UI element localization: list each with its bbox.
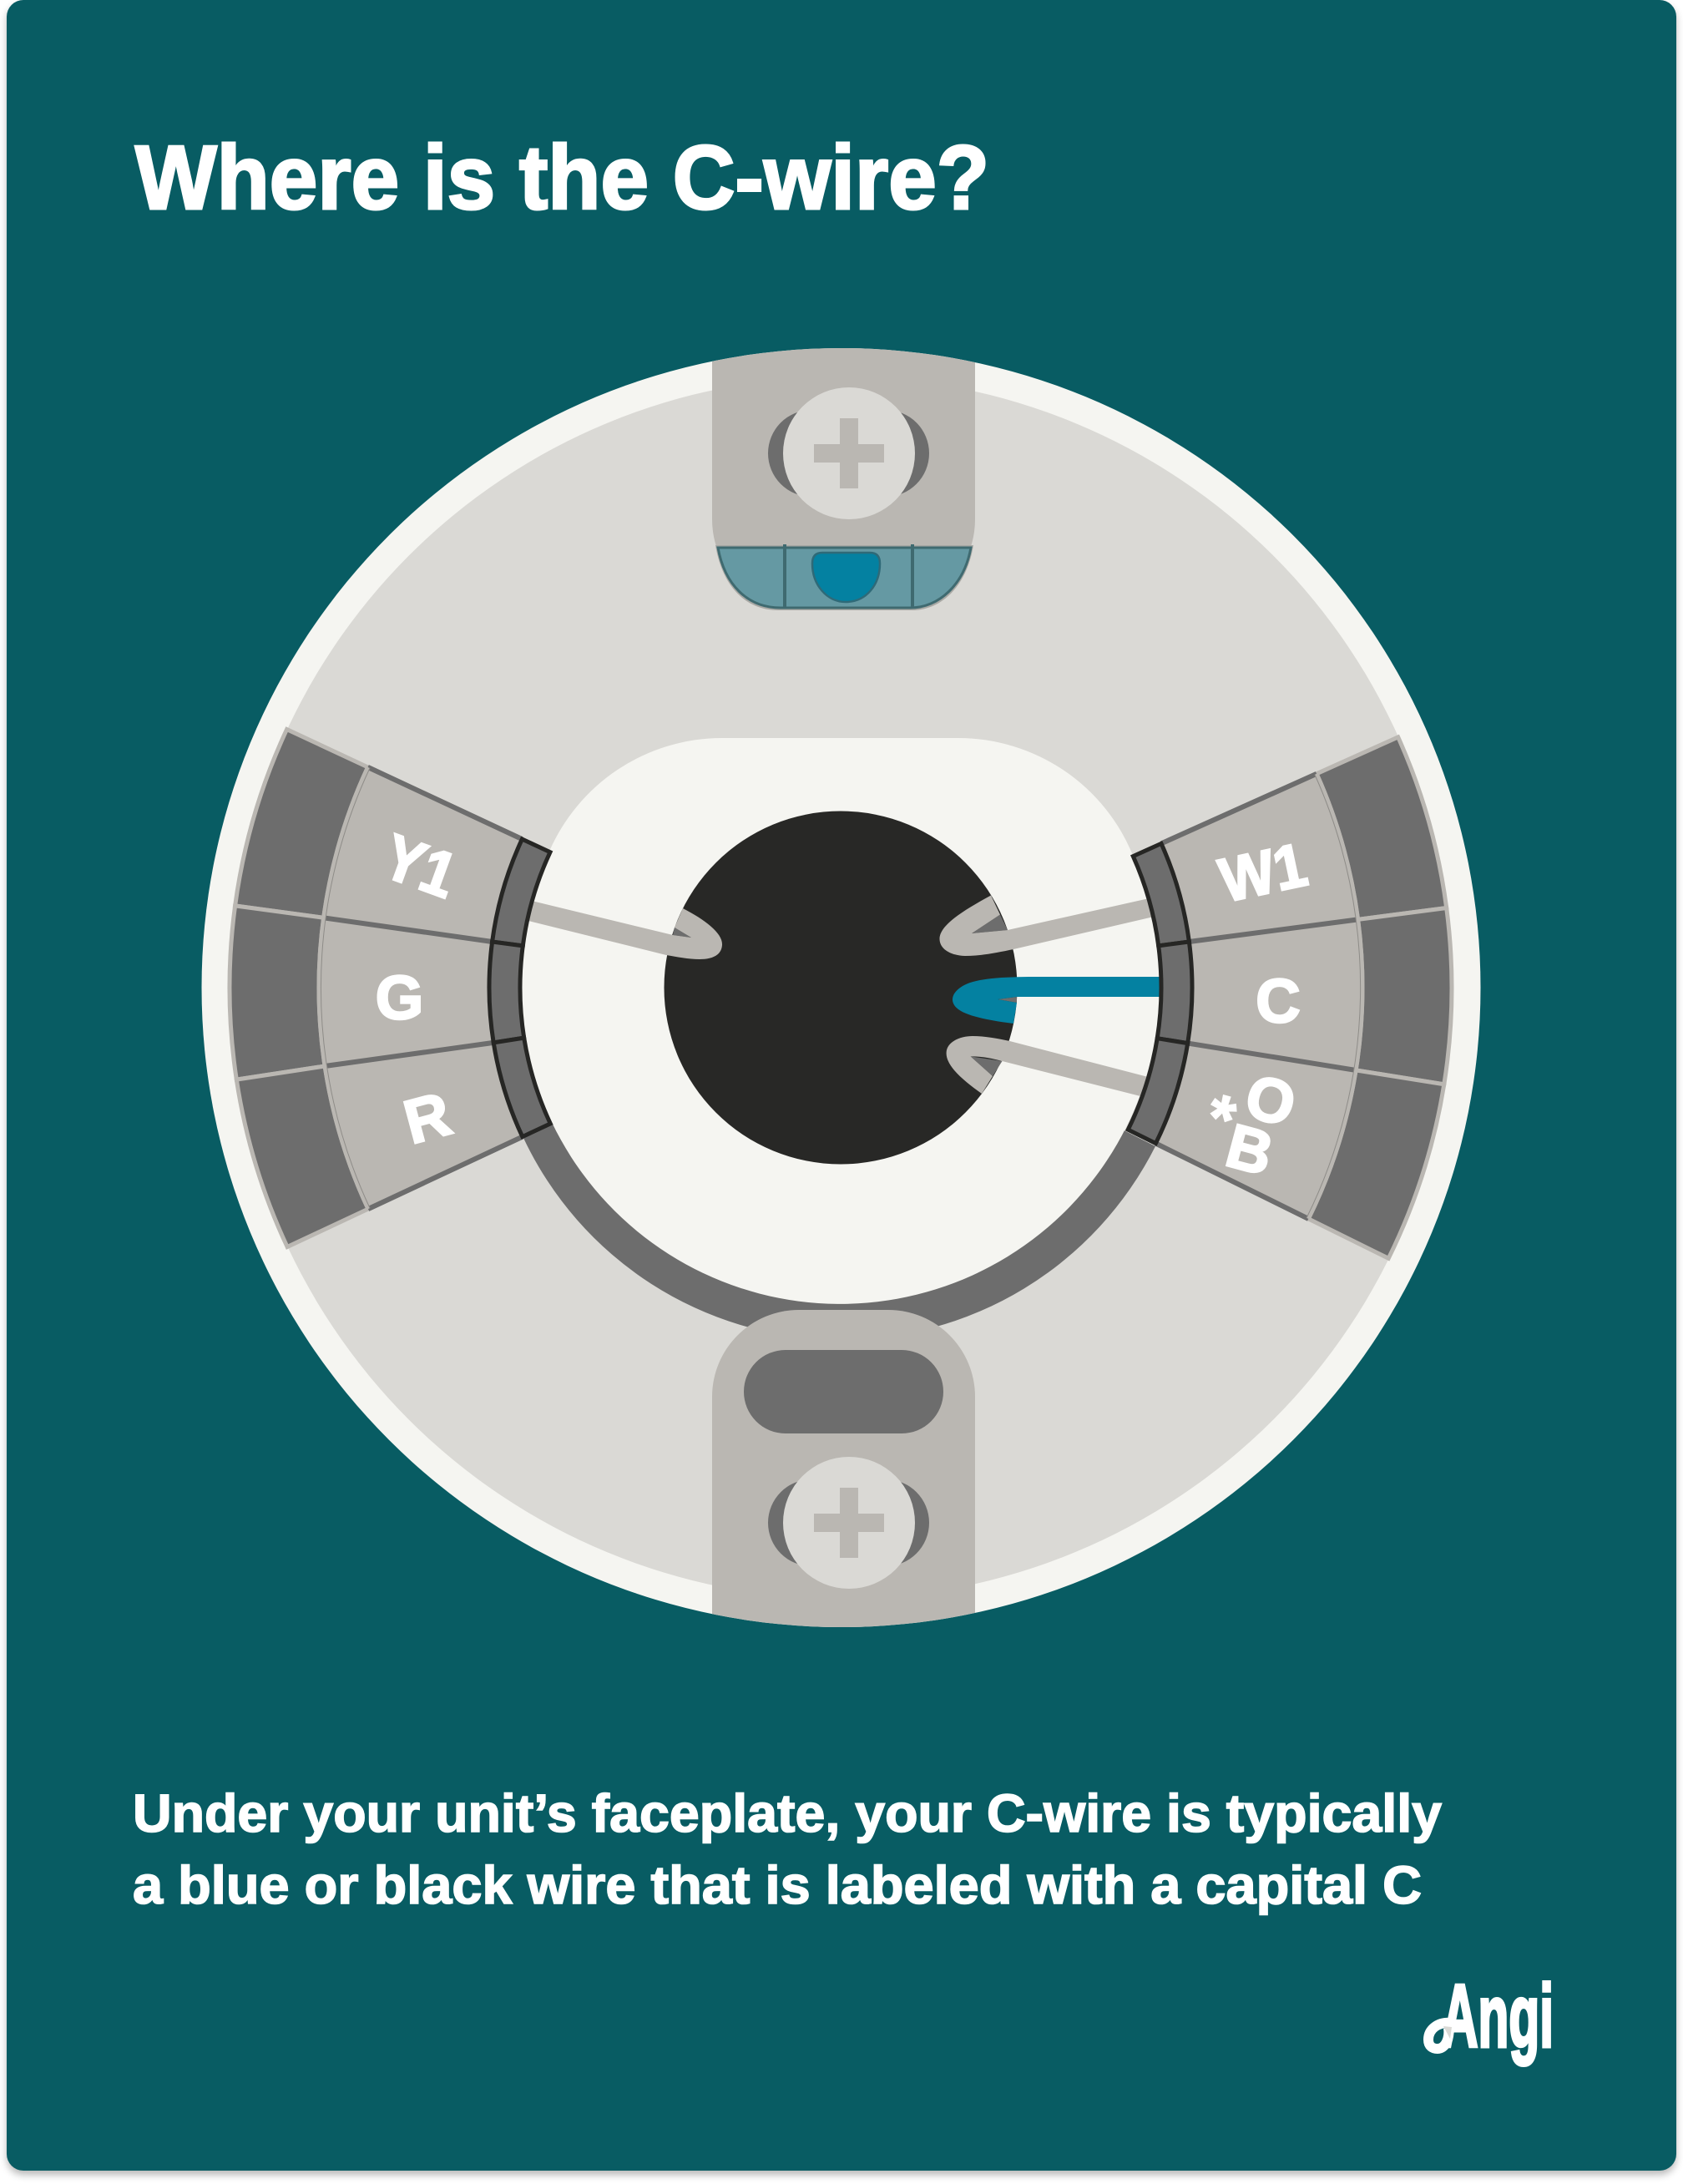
caption: a blue or black wire that is labeled with a capital C (133, 1855, 1422, 1915)
label W1: W1 (1214, 830, 1312, 915)
black wall hole (665, 811, 1017, 1164)
label G: G (376, 963, 423, 1032)
left inner band (489, 839, 550, 1137)
label Y1: Y1 (374, 821, 466, 913)
central white opening (520, 738, 1160, 1304)
left terminal faces (319, 767, 523, 1209)
left outer dark segments (230, 730, 368, 1247)
top screw (768, 387, 929, 519)
label O: O (1238, 1060, 1303, 1140)
bottom screw (768, 1457, 929, 1589)
wire: Y1 (528, 901, 722, 959)
caption: Under your unit’s faceplate, your C-wire is typically (133, 1783, 1442, 1843)
bottom mounting bracket (712, 1310, 975, 1636)
label asterisk: * (1199, 1079, 1244, 1158)
right terminal faces (1155, 774, 1362, 1219)
Angi logo: Angi (1442, 1965, 1554, 2065)
wire: O/B (947, 1036, 1151, 1097)
top mounting bracket (712, 334, 975, 610)
title: Where is the C-wire? (135, 127, 989, 229)
mounting slot (744, 1350, 943, 1433)
bubble level (715, 544, 973, 610)
label R: R (397, 1079, 458, 1157)
lower dark ring (523, 988, 1155, 1340)
right inner band (1128, 843, 1192, 1144)
thermostat base plate (202, 348, 1481, 1627)
illustration and text canvas (134, 142, 1551, 2067)
Angi logo (1428, 1965, 1554, 2065)
wire: C, blue (953, 977, 1162, 1024)
left terminal block (230, 730, 550, 1247)
wire: W1 (939, 895, 1154, 956)
label B: B (1219, 1110, 1281, 1189)
right outer dark segments (1308, 737, 1452, 1258)
label C: C (1256, 967, 1301, 1035)
right terminal block (1128, 737, 1452, 1258)
thermostat wiring diagram (202, 334, 1481, 1636)
caption (133, 1783, 1442, 1915)
